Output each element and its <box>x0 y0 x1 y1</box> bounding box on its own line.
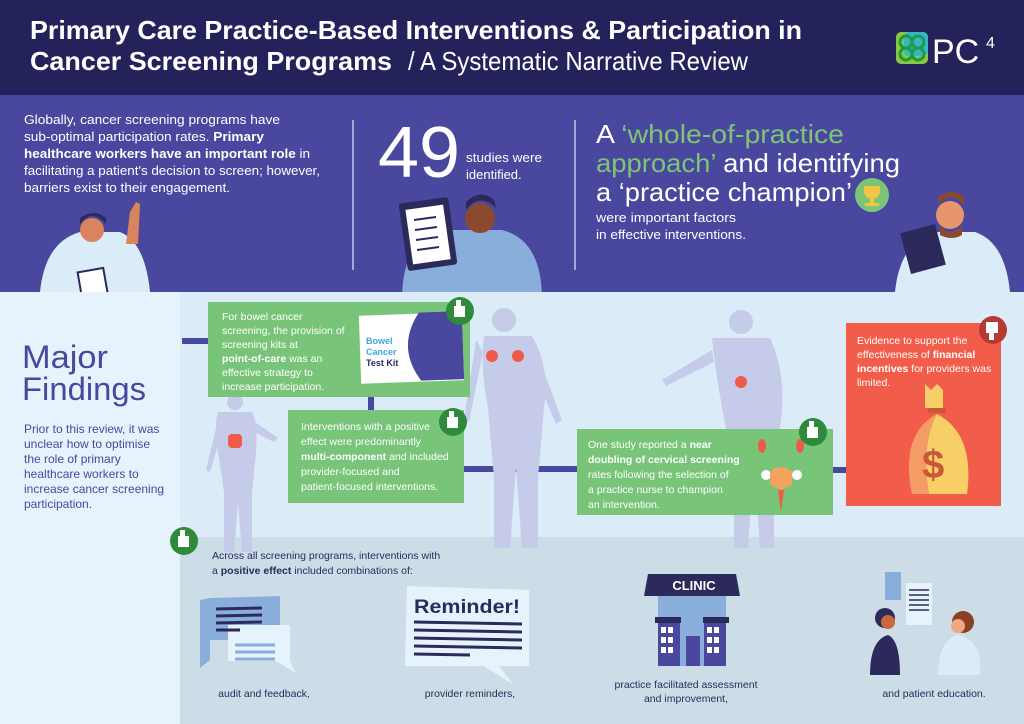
intro band <box>0 95 1024 302</box>
card: cervical screening: doubling of cervical screening <box>588 454 740 466</box>
text: prior review: unclear how to optimise <box>24 437 150 451</box>
figure: woman left <box>206 394 278 552</box>
card: bowel cancer kits: point-of-care was an <box>222 353 323 365</box>
logo PC4: 4 <box>986 35 995 52</box>
card: multi-component: multi-component and included <box>301 451 449 463</box>
text: prior review: Prior to this review, it was <box>24 422 159 436</box>
card: multi-component: effect were predominantly <box>301 436 422 448</box>
whole-of-practice statement: in effective interventions. <box>596 227 746 242</box>
card: financial incentives: effectiveness of financial <box>857 349 975 361</box>
heading Major Findings <box>22 339 146 407</box>
whole-of-practice statement: were important factors <box>595 210 737 225</box>
card: multi-component <box>288 408 467 503</box>
title: / A Systematic Narrative Review <box>408 46 748 76</box>
item: patient education <box>870 572 986 700</box>
card: bowel cancer kits: For bowel cancer <box>222 311 303 323</box>
icon: test kit <box>359 311 464 384</box>
text: prior review: the role of primary <box>24 452 121 466</box>
stat 49: studies were <box>466 150 542 165</box>
intro text: sub-optimal participation rates. Primary <box>24 129 265 144</box>
card: cervical screening: One study reported a near <box>588 439 712 451</box>
text: prior review: increase cancer screening <box>24 482 164 496</box>
intro text <box>24 112 320 195</box>
intro text: healthcare workers have an important role in <box>24 146 310 161</box>
icon: money bag <box>909 384 968 494</box>
heading Major Findings: Findings <box>22 371 146 407</box>
whole-of-practice statement: approach’ and identifying <box>596 148 900 178</box>
item: provider reminders <box>405 586 529 700</box>
heading Major Findings: Major <box>22 339 108 375</box>
intro text: facilitating a patient's decision to screen; however, <box>24 163 320 178</box>
card: financial incentives: limited. <box>857 377 890 389</box>
bottom section: intervention combinations <box>170 527 986 705</box>
item: provider reminders: Reminder! <box>414 597 520 618</box>
card: bowel cancer kits: increase participation. <box>222 381 324 393</box>
card: bowel cancer kits: screening, the provision of <box>222 325 345 337</box>
item: patient education: and patient education. <box>882 688 986 700</box>
whole-of-practice statement <box>595 119 900 242</box>
text: prior review: healthcare workers to <box>24 467 139 481</box>
icon: thumbs up <box>799 418 827 446</box>
text: prior review <box>24 422 164 511</box>
item: clinic <box>615 574 758 705</box>
logo PC4 <box>896 32 995 71</box>
stat 49: identified. <box>466 167 522 182</box>
icon: test kit: Cancer <box>366 347 397 357</box>
card: cervical screening: an intervention. <box>588 499 660 511</box>
item: audit and feedback: audit and feedback, <box>218 688 310 700</box>
intro text: Across all screening programs, interventions with <box>212 550 440 562</box>
stat 49: 49 <box>378 113 460 193</box>
card: bowel cancer kits <box>208 297 474 397</box>
intro text <box>212 550 440 577</box>
card: financial incentives: incentives for providers was <box>857 363 991 375</box>
card: financial incentives <box>846 316 1007 506</box>
icon: reproductive organs <box>758 439 804 512</box>
item: clinic: and improvement, <box>644 693 728 705</box>
card: bowel cancer kits: effective strategy to <box>222 367 313 379</box>
icon: test kit: Bowel <box>366 336 393 346</box>
item: audit and feedback <box>200 596 310 700</box>
icon: trophy badge <box>855 178 889 212</box>
card: multi-component: Interventions with a positive <box>301 421 430 433</box>
intro text: a positive effect included combinations of: <box>212 565 413 577</box>
doctor right <box>895 192 1010 292</box>
icon: test kit: Test Kit <box>366 358 398 368</box>
doctor center with clipboard <box>399 194 542 300</box>
card: financial incentives: Evidence to support the <box>857 335 967 347</box>
left column <box>0 292 180 724</box>
title: Cancer Screening Programs <box>30 46 392 76</box>
logo PC4: PC <box>932 33 979 71</box>
title: Primary Care Practice-Based Interventions & Participation in <box>30 15 802 45</box>
icon: thumbs down <box>979 316 1007 344</box>
whole-of-practice statement: A ‘whole-of-practice <box>596 119 844 149</box>
whole-of-practice statement: a ‘practice champion’ <box>596 177 852 207</box>
intro text: barriers exist to their engagement. <box>24 180 230 195</box>
intro text: Globally, cancer screening programs have <box>24 112 280 127</box>
card: multi-component: patient-focused interventions. <box>301 481 438 493</box>
card: multi-component: provider-focused and <box>301 466 400 478</box>
icon: money bag: $ <box>922 443 944 487</box>
figure: woman center <box>464 308 562 548</box>
stat 49 <box>378 113 542 193</box>
icon: thumbs up <box>446 297 474 325</box>
item: clinic: practice facilitated assessment <box>615 679 758 691</box>
findings area <box>180 292 1024 724</box>
title <box>30 15 802 76</box>
card: cervical screening: rates following the selection of <box>588 469 729 481</box>
item: clinic: CLINIC <box>672 578 716 593</box>
figure: woman right <box>662 310 782 548</box>
icon: thumbs up <box>439 408 467 436</box>
text: prior review: participation. <box>24 497 92 511</box>
doctor left <box>40 202 150 302</box>
card: cervical screening <box>577 418 833 515</box>
header band <box>0 0 1024 95</box>
item: provider reminders: provider reminders, <box>425 688 515 700</box>
icon: thumbs up <box>170 527 198 555</box>
card: bowel cancer kits: screening kits at <box>222 339 298 351</box>
card: cervical screening: a practice nurse to champion <box>588 484 723 496</box>
